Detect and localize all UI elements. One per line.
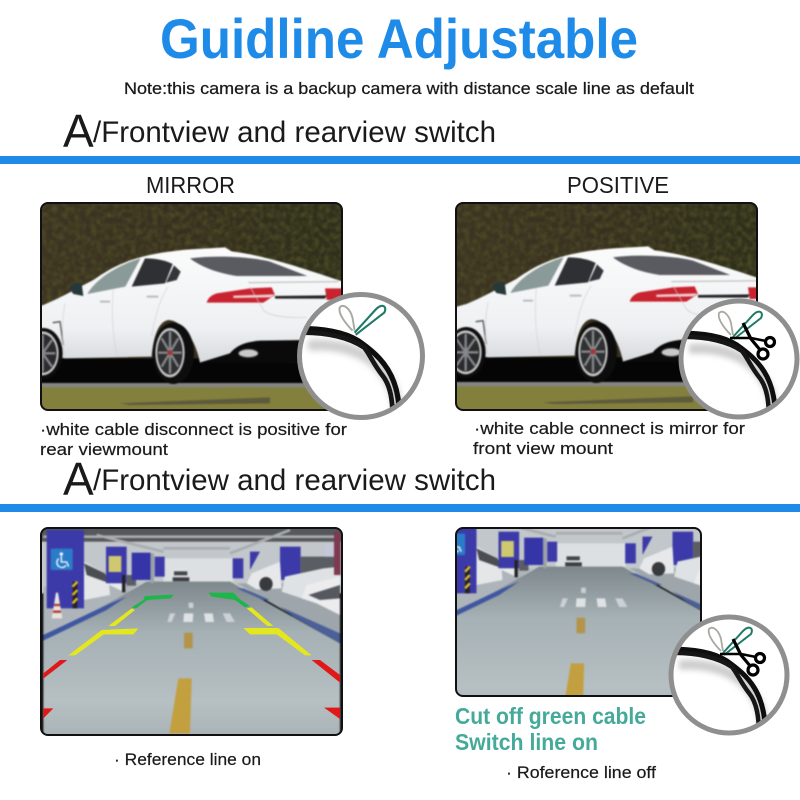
guide lines: green (132, 593, 250, 608)
section heading: first switch (63, 105, 496, 157)
photo: white car rear view (42, 204, 341, 409)
teal instruction text: Switch line on (455, 729, 598, 755)
caption: positive: front view mount (473, 439, 613, 458)
title: Guidline Adjustable (160, 7, 638, 70)
caption: mirror (40, 420, 347, 459)
inset: cable loop with scissors, parking (667, 616, 788, 737)
caption: positive (473, 419, 745, 458)
section heading: second switch (63, 453, 496, 505)
section heading: second switch: A (63, 453, 94, 505)
section heading: first switch: A (63, 105, 94, 157)
note text: Note:this camera is a backup camera with distance scale line as default (124, 79, 694, 98)
caption: positive: ·white cable connect is mirror for (474, 419, 745, 438)
photo without guide lines (457, 529, 700, 695)
panel: mirror car photo (40, 202, 343, 411)
guide lines: red (43, 660, 340, 719)
photo with guide lines (42, 529, 341, 734)
teal instruction text (455, 703, 646, 755)
section bar: second (0, 504, 800, 512)
photo: white car rear view shifted (457, 204, 756, 409)
panel: positive car photo (455, 202, 758, 411)
inset: cable loop, uncut (295, 293, 424, 422)
section heading: second switch: /Frontview and rearview switch (93, 464, 496, 497)
caption: reference line off: · Roference line off (506, 763, 656, 782)
panel: parking view without reference lines (455, 527, 702, 697)
inset: cable loop with scissors (677, 300, 798, 421)
teal instruction text: Cut off green cable (455, 703, 646, 729)
panel: parking view with reference lines (40, 527, 347, 753)
caption: mirror: ·white cable disconnect is positive for (40, 420, 347, 439)
guide lines: yellow (68, 607, 312, 655)
caption: mirror: rear viewmount (40, 440, 168, 459)
label: mirror: MIRROR (146, 172, 235, 198)
label: positive: POSITIVE (567, 172, 669, 198)
section bar: first (0, 156, 800, 164)
caption: reference line on: · Reference line on (114, 750, 261, 769)
section heading: first switch: /Frontview and rearview switch (93, 116, 496, 149)
